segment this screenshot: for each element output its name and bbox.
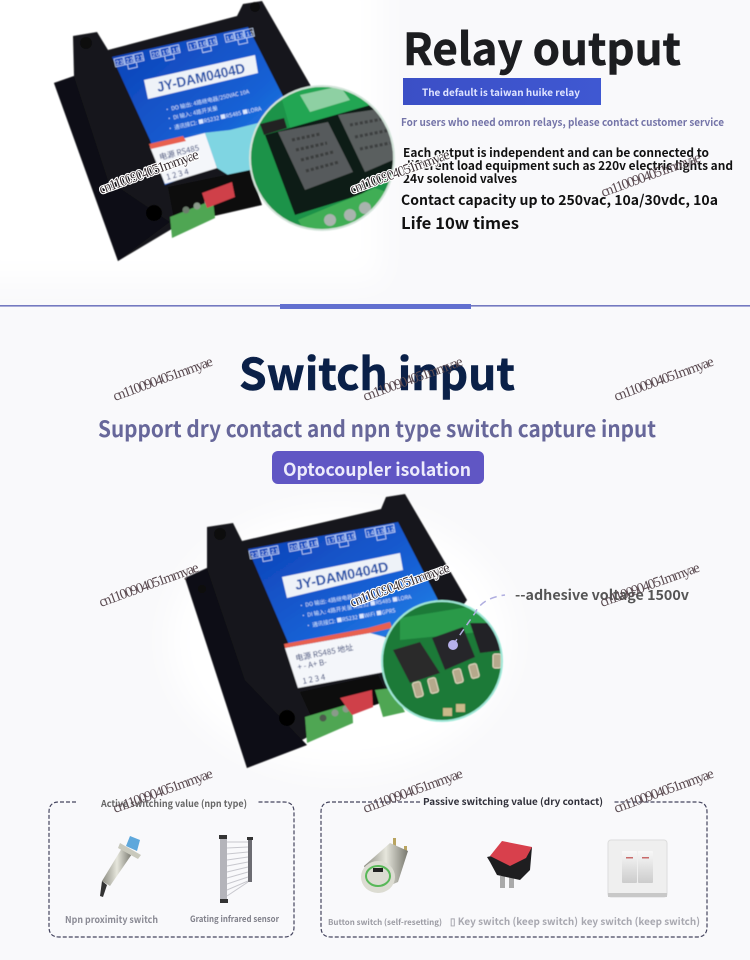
screw terminal xyxy=(168,170,262,225)
dip switch xyxy=(340,690,373,715)
watermarks: cn1100904051mmyae xyxy=(361,766,465,817)
terminal legend text: 1 2 3 4 xyxy=(165,166,191,183)
text block: independent outputs: 24v solenoid valves xyxy=(403,170,517,187)
terminal numbers: 17 16 15 xyxy=(189,39,218,51)
terminal numbers: 20 19 18 xyxy=(152,47,181,59)
panel dashed frame xyxy=(321,802,707,937)
watermarks: cn1100904051mmyae xyxy=(97,560,201,611)
watermarks: cn1100904051mmyae xyxy=(348,560,452,611)
panel specs: • DO 输出: 4路继电器/250VAC 10A xyxy=(298,587,385,610)
note: omron relays: For users who need omron relays, please contact customer service xyxy=(401,115,724,130)
badge: default relay xyxy=(403,78,601,105)
module name: JY-DAM0404D xyxy=(293,558,390,593)
terminal numbers: 23 22 21 xyxy=(250,548,280,559)
text: life: Life 10w times xyxy=(401,210,519,234)
magnifier ring xyxy=(250,86,394,230)
panel heading: Passive switching value (dry contact) xyxy=(423,794,603,808)
panel: passive switching value xyxy=(321,794,707,937)
label: button switch: Button switch (self-resetting) xyxy=(328,917,442,928)
terminal numbers: 20 19 18 xyxy=(290,541,319,552)
panel heading: Active switching value (npn type) xyxy=(100,796,247,810)
label: npn proximity switch: Npn proximity switch xyxy=(65,912,158,926)
optocoupler chip one xyxy=(393,642,440,683)
terminal numbers xyxy=(114,28,256,72)
white terminal legend xyxy=(150,133,217,184)
icon: light grating sensor xyxy=(219,835,253,903)
watermarks: cn1100904051mmyae xyxy=(348,147,452,198)
solder pins xyxy=(412,654,501,698)
module name plate xyxy=(144,55,258,99)
watermarks: cn1100904051mmyae xyxy=(612,766,716,817)
icon: wall switch xyxy=(608,840,667,897)
module blue label panel xyxy=(248,522,438,647)
terminal numbers: 14 13 12 xyxy=(366,527,396,538)
module name: JY-DAM0404D xyxy=(155,60,247,95)
terminal legend text: 1 2 3 4 xyxy=(301,672,327,687)
panel: active switching value xyxy=(49,796,294,937)
panel specs: • 通讯接口: ■RS232 ■RS485 ■LORA xyxy=(167,104,263,133)
panel specs: • 通讯接口: ■RS232 ■WiFi ■GPRS xyxy=(305,606,397,630)
right terminal xyxy=(375,688,405,717)
terminal legend text: + - A+ B- xyxy=(296,656,328,673)
badge: default relay: The default is taiwan huike relay xyxy=(422,84,580,99)
badge: optocoupler isolation: Optocoupler isolation xyxy=(283,456,471,482)
terminal legend text xyxy=(158,142,200,183)
terminal numbers: 14 13 12 xyxy=(226,31,255,43)
panel specs: • DI 输入: 4路开关量 RS232 ■RS485 ■LORA xyxy=(300,592,413,620)
panel specs: • DI 输入: 4路开关量 xyxy=(166,104,219,123)
relay one xyxy=(278,122,353,190)
cyan lower panel area xyxy=(185,122,268,190)
panel specs xyxy=(164,87,263,133)
product photo backdrop two xyxy=(170,510,510,770)
panel specs: • DO 输出: 4路继电器/250VAC 10A xyxy=(164,87,251,114)
module name plate xyxy=(282,553,403,598)
label: key switch one: ▯ Key switch (keep switch) xyxy=(450,913,578,928)
label: grating infrared sensor: Grating infrared sensor xyxy=(190,913,279,925)
icon: red rocker switch xyxy=(487,841,532,888)
white terminal legend xyxy=(285,633,395,688)
terminal numbers xyxy=(249,524,397,564)
title: Relay output: Relay output xyxy=(403,14,681,78)
terminal legend text xyxy=(294,642,354,687)
optocoupler chip three xyxy=(470,623,505,653)
dip switch xyxy=(202,182,235,208)
optocoupler chip two xyxy=(432,627,475,670)
callout text: --adhesive voltage 1500v xyxy=(515,585,689,605)
watermarks: cn1100904051mmyae xyxy=(361,354,465,405)
watermarks: cn1100904051mmyae xyxy=(599,150,703,201)
text: contact capacity: Contact capacity up to 250vac, 10a/30vdc, 10a xyxy=(401,190,718,210)
screw terminal xyxy=(300,675,390,725)
module black housing xyxy=(185,494,467,768)
product photo backdrop one xyxy=(0,0,380,280)
section divider xyxy=(0,304,750,309)
panel dashed frame xyxy=(49,802,294,937)
panel specs xyxy=(298,587,413,630)
watermarks: cn1100904051mmyae xyxy=(598,560,702,611)
watermarks: cn1100904051mmyae xyxy=(111,766,215,817)
icon: metal push button xyxy=(361,838,408,893)
module black housing xyxy=(54,1,312,261)
subtitle: Support dry contact and npn type switch capture input xyxy=(98,412,656,444)
label: key switch two: key switch (keep switch) xyxy=(581,913,700,928)
module blue label panel xyxy=(112,27,290,185)
watermarks xyxy=(97,147,716,817)
magnifier: relays xyxy=(250,86,395,232)
relay two xyxy=(338,107,393,172)
callout leader xyxy=(448,595,505,650)
magnifier: optocouplers xyxy=(382,601,505,722)
terminal numbers: 23 22 21 xyxy=(116,55,145,67)
text block: independent outputs: Each output is independent and can be connected to xyxy=(403,144,709,161)
product photo: relay module xyxy=(54,1,395,261)
green terminal block xyxy=(298,188,384,229)
text block: independent outputs: different load equipment such as 220v electric lights and xyxy=(403,157,733,174)
small IC xyxy=(260,118,287,135)
text block: independent outputs xyxy=(403,144,733,187)
watermarks: cn1100904051mmyae xyxy=(111,354,215,405)
terminal legend text: 电源 RS485 xyxy=(158,142,200,163)
terminal numbers: 17 16 15 xyxy=(327,534,356,545)
watermarks: cn1100904051mmyae xyxy=(97,147,201,198)
magnifier ring xyxy=(382,601,502,721)
terminal legend text: 电源 RS485 地址 xyxy=(294,642,354,664)
title: Switch input: Switch input xyxy=(239,339,515,403)
product photo: optocoupler module xyxy=(185,494,505,768)
watermarks: cn1100904051mmyae xyxy=(612,354,716,405)
icon: proximity sensor xyxy=(100,836,141,897)
